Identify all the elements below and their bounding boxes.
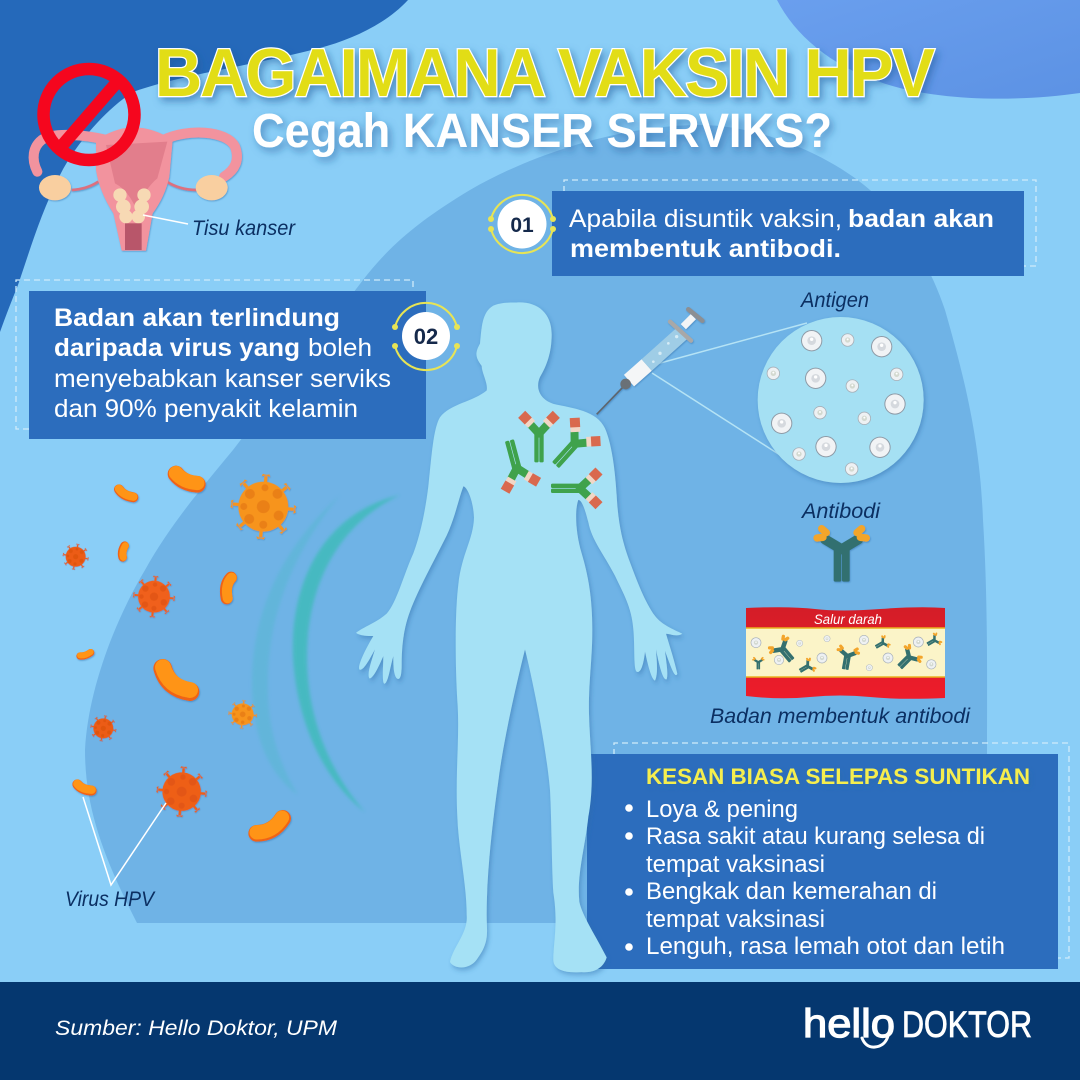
- shape: top-right blue blob: [777, 0, 1080, 99]
- label: tisu kanser: Tisu kanser: [192, 217, 296, 240]
- human body silhouette: [356, 302, 682, 972]
- blood vessel: [746, 607, 945, 699]
- list: side effects: tempat vaksinasi: [646, 906, 825, 933]
- icon: prohibition sign: [44, 69, 134, 160]
- panel: step 01: [552, 180, 1036, 276]
- title: BAGAIMANA VAKSIN HPV: [155, 35, 935, 111]
- uterus illustration: [34, 127, 237, 251]
- viruses and bacteria: [60, 471, 299, 833]
- panel: step 02: menyebabkan kanser serviks: [54, 365, 391, 393]
- title: Cegah KANSER SERVIKS?: [252, 105, 832, 158]
- virus medium red: [131, 574, 177, 619]
- list: side effects: tempat vaksinasi: [646, 851, 825, 878]
- panel: side effects: [587, 743, 1069, 969]
- antibodies in chest: [493, 414, 600, 506]
- virus small orange: [227, 699, 258, 730]
- title: [155, 35, 935, 158]
- logo: hello doktor: hello: [803, 1002, 895, 1046]
- list: side effects: [625, 796, 1005, 960]
- badge: 01: [488, 195, 556, 253]
- shield arcs: [252, 495, 400, 812]
- shape: top-left dark blue: [0, 0, 408, 332]
- badge: 02: [392, 303, 460, 370]
- panel: step 02: daripada virus yang: [54, 334, 300, 362]
- virus large: [228, 471, 299, 542]
- label: virus HPV: [65, 797, 166, 911]
- list: side effects: Loya & pening: [646, 796, 798, 823]
- antigen magnified circle: [758, 317, 924, 483]
- label: antigen: Antigen: [799, 289, 869, 312]
- label: antibodi: Antibodi: [800, 500, 881, 523]
- badge: 02: 02: [414, 324, 438, 349]
- logo: hello doktor: DOKTOR: [902, 1004, 1032, 1045]
- zoom lines: syringe to antigen: [652, 323, 807, 455]
- label: badan membentuk antibodi: Badan membentuk antibodi: [710, 705, 971, 728]
- list: side effects: Lenguh, rasa lemah otot dan letih: [646, 933, 1005, 960]
- virus large red: [154, 764, 209, 819]
- label: tisu kanser: [143, 215, 296, 240]
- list: side effects: Bengkak dan kemerahan di: [646, 878, 937, 905]
- logo: hello doktor: [803, 1002, 1032, 1047]
- panel: step 02: boleh: [308, 334, 372, 362]
- icon: antibody: [817, 529, 866, 582]
- shape: mid-blue arch: [85, 125, 987, 923]
- footer band: [0, 982, 1080, 1080]
- panel: step 01: membentuk antibodi.: [570, 235, 841, 263]
- panel: step 02: [16, 280, 426, 439]
- panel: step 02: Badan akan terlindung: [54, 304, 340, 332]
- icon: syringe: [597, 309, 702, 414]
- virus small red: [60, 541, 91, 572]
- panel: step 01: Apabila disuntik vaksin,: [569, 205, 842, 233]
- panel: step 01: badan akan: [848, 205, 994, 233]
- blood vessel: Salur darah: [814, 612, 882, 627]
- source text: Sumber: Hello Doktor, UPM: [55, 1017, 338, 1040]
- list: side effects: Rasa sakit atau kurang selesa di: [646, 823, 985, 850]
- virus small red 2: [88, 713, 119, 744]
- panel: step 02: dan 90% penyakit kelamin: [54, 395, 358, 423]
- heading: side effects: KESAN BIASA SELEPAS SUNTIKAN: [646, 764, 1030, 789]
- label: virus HPV: Virus HPV: [65, 888, 156, 911]
- beans: [77, 473, 283, 833]
- badge: 01: 01: [510, 214, 534, 237]
